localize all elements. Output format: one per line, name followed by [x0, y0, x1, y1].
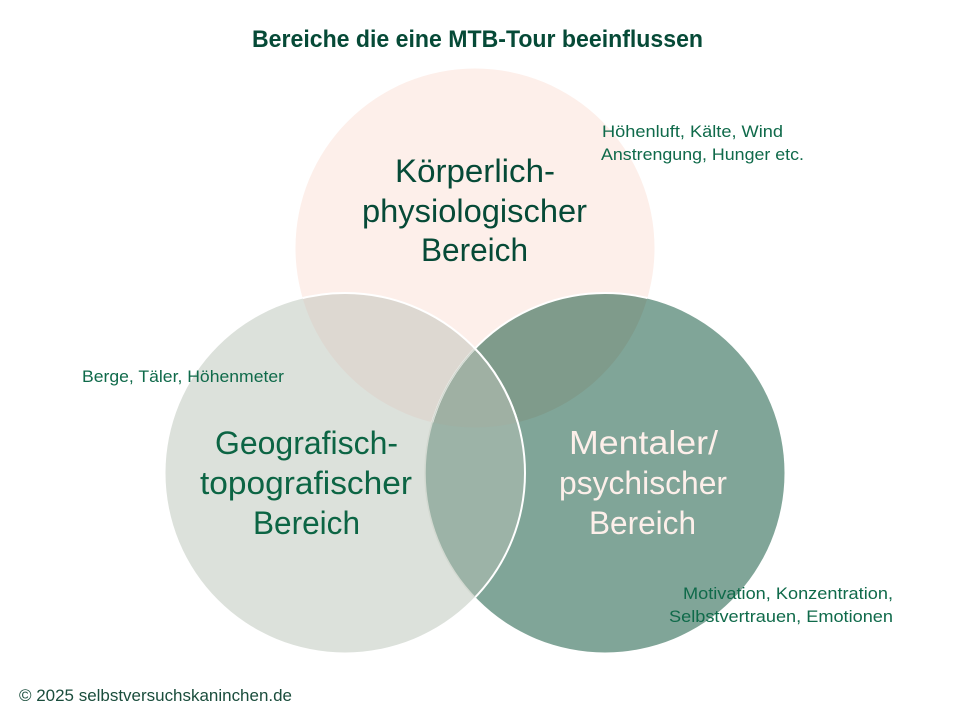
heading: mental area: Mentaler/ [569, 424, 719, 461]
heading: mental area: Bereich [589, 505, 696, 541]
heading: geographic area [200, 425, 412, 541]
heading: physical area: Körperlich- [395, 153, 555, 189]
outline: mental circle inside geographic circle [424, 349, 475, 598]
heading: mental area [559, 424, 727, 541]
title: Bereiche die eine MTB-Tour beeinflussen [252, 26, 703, 53]
circle: physical area [296, 68, 654, 428]
footer: copyright: © 2025 selbstversuchskaninchen.de [19, 686, 292, 705]
circle: geographic area [166, 294, 524, 652]
heading: mental area: psychischer [559, 465, 727, 501]
note: physical factors: Anstrengung, Hunger etc. [601, 146, 804, 164]
heading: physical area: Bereich [421, 232, 528, 268]
note: mental factors [669, 585, 893, 626]
circle: mental area [426, 294, 784, 652]
outline: mental circle inside physical circle [432, 292, 648, 422]
heading: physical area [362, 153, 587, 268]
heading: geographic area: Geografisch- [215, 425, 398, 461]
note: physical factors: Höhenluft, Kälte, Wind [602, 123, 783, 141]
note: physical factors [601, 123, 804, 164]
overlap: geographic and mental [426, 422, 524, 596]
heading: physical area: physiologischer [362, 193, 587, 229]
outline: geographic circle inside physical circle [302, 292, 519, 422]
overlap: physical and geographic [303, 294, 474, 422]
heading: geographic area: Bereich [253, 505, 360, 541]
overlap: all three areas [426, 294, 784, 652]
note: mental factors: Motivation, Konzentration, [683, 585, 893, 603]
note: geographic factors: Berge, Täler, Höhenmeter [82, 368, 285, 386]
heading: geographic area: topografischer [200, 465, 412, 501]
venn circles [165, 68, 785, 653]
outline: geographic circle inside mental circle [474, 348, 526, 598]
overlap: physical and mental [476, 294, 647, 422]
note: mental factors: Selbstvertrauen, Emotionen [669, 608, 893, 626]
